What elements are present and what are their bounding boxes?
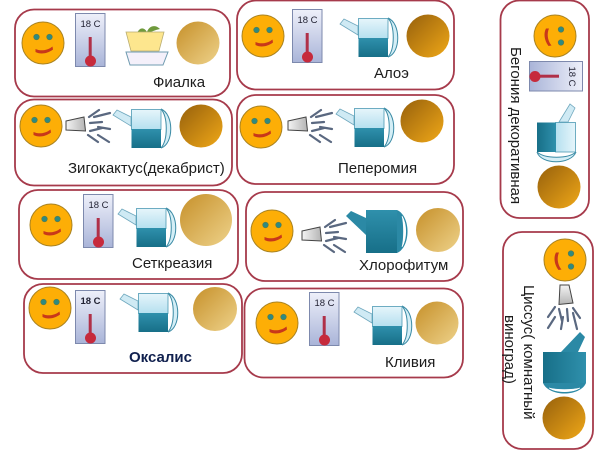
panel: Сеткреазия [19,190,238,279]
icon: spray [302,220,346,252]
icon: thermometer 18 C [76,290,105,344]
icon: smiley [251,210,293,252]
panel: Хлорофитум [246,192,463,281]
icon: light level [542,396,586,440]
icon: full watering can [346,210,408,253]
label: Кливия [385,354,435,371]
icon: watering can [336,108,394,147]
icon: plant in pot [126,26,168,65]
label: Фиалка [153,74,206,91]
panel: Фиалка [15,10,230,96]
icon: light level [180,194,232,246]
icon: smiley [20,105,62,147]
label: Зигокактус(декабрист) [68,160,225,177]
panel: Кливия [244,288,463,378]
icon: thermometer 18 C [84,194,113,248]
panel: Оксалис [24,284,242,373]
icon: thermometer 18 C [310,292,339,346]
icon: light level [176,22,220,64]
panel: Пеперомия [237,95,454,184]
icon: thermometer 18 C: 18 C [566,66,577,87]
icon: thermometer 18 C: 18 C [314,298,335,309]
icon: thermometer 18 C [76,14,105,66]
icon: smiley [29,287,71,329]
panel: Циссус [501,232,593,449]
label: Бегония декоративная [507,47,524,204]
icon: smiley [30,204,72,246]
label: Хлорофитум [359,257,448,274]
icon: watering can [120,293,178,332]
icon: light level [180,104,222,148]
icon: light level [538,166,580,208]
panel: Бегония декоративная [500,0,589,218]
icon: thermometer 18 C: 18 C [80,19,101,30]
icon: smiley [256,302,298,344]
icon: smiley [22,22,64,64]
icon: thermometer 18 C: 18 C [88,200,109,211]
icon: smiley [534,15,576,57]
icon: watering can [113,109,171,148]
label: Сеткреазия [132,255,212,272]
icon: watering can [537,104,576,162]
icon: spray [548,285,580,329]
icon: watering can [340,18,398,57]
icon: light level [406,14,450,58]
icon: light level [416,302,458,344]
icon: thermometer 18 C: 18 C [297,15,318,26]
icon: full watering can [543,332,586,394]
icon: thermometer 18 C [292,10,322,62]
icon: smiley [242,15,284,57]
icon: thermometer 18 C [530,62,582,91]
icon: smiley [544,239,586,281]
label: Алоэ [374,65,409,82]
icon: light level [400,100,444,142]
panel: Алоэ [237,0,454,90]
icon: smiley [240,106,282,148]
icon: watering can [118,208,176,247]
label line 2: виноград) [501,315,518,384]
icon: light level [193,287,237,331]
icon: watering can [354,306,412,345]
label: Циссус( комнатный [520,285,537,419]
icon: thermometer 18 C: 18 C [80,296,101,307]
label: Оксалис [129,349,192,366]
icon: spray [66,110,110,142]
panel: Зигокактус [15,100,232,186]
icon: light level [416,208,460,252]
icon: spray [288,110,332,142]
label: Пеперомия [338,160,417,177]
